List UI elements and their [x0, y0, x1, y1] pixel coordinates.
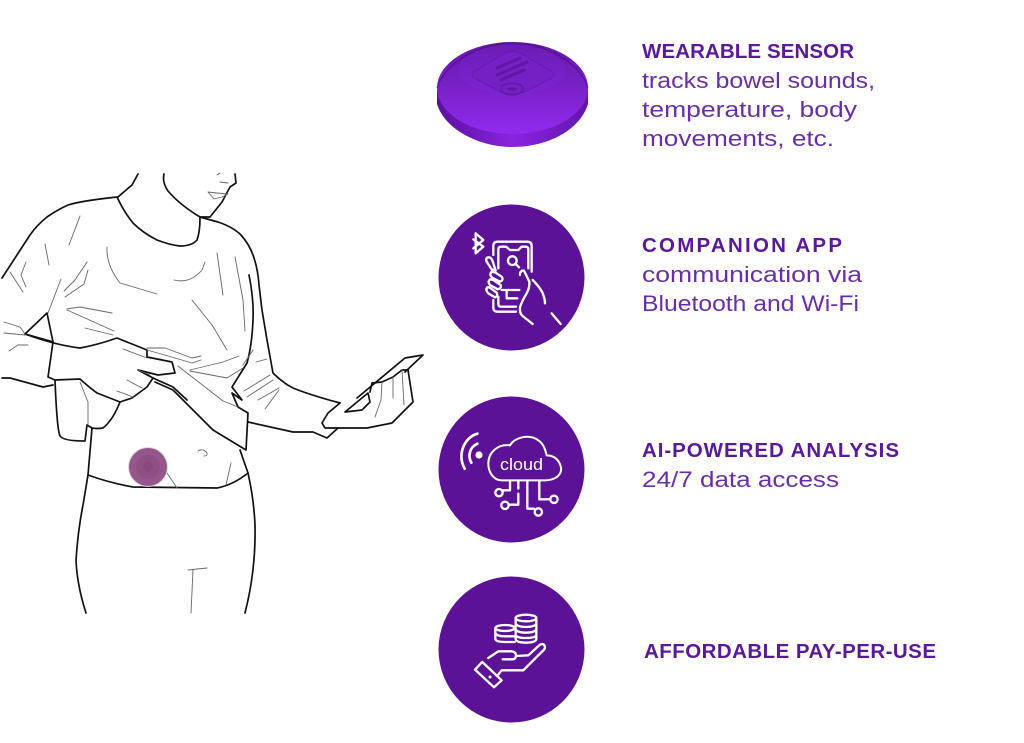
text: companion app [642, 234, 863, 316]
illustration: person with sensor looking at phone [2, 173, 423, 613]
text: wearable sensor [642, 40, 875, 151]
icon: companion app [438, 204, 584, 350]
text: companion app: COMPANION APP [642, 234, 842, 257]
text: companion app: communication via [642, 262, 863, 287]
icon: hand with coins [438, 576, 584, 722]
text: wearable sensor: movements, etc. [642, 126, 834, 151]
shirt and body outline [2, 174, 423, 613]
text: wearable sensor: temperature, body [642, 97, 857, 122]
text: AI-powered analysis [642, 439, 899, 492]
text: AI-powered analysis: AI-POWERED ANALYSIS [642, 439, 899, 462]
text: companion app: Bluetooth and Wi-Fi [642, 291, 859, 316]
text: affordable pay-per-use: AFFORDABLE PAY-PER-USE [644, 640, 936, 663]
clothing folds [4, 173, 404, 613]
text: wearable sensor: WEARABLE SENSOR [642, 40, 854, 63]
icon: cloud analysis [438, 396, 584, 542]
icon: wearable sensor disc [437, 42, 588, 147]
icon: cloud analysis: cloud [500, 455, 543, 474]
text: wearable sensor: tracks bowel sounds, [642, 68, 875, 93]
text: AI-powered analysis: 24/7 data access [642, 467, 839, 492]
sensor patch on abdomen [128, 448, 168, 486]
